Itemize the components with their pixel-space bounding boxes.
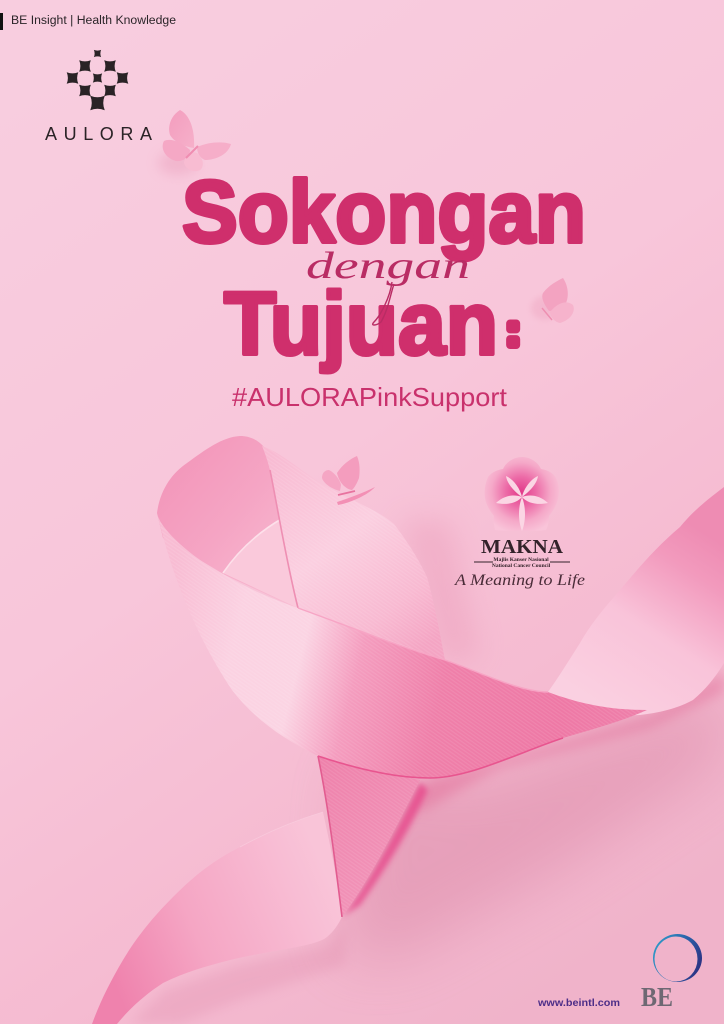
ribbon: front band [157, 513, 647, 778]
subtitle: National Cancer Council: National Cancer Council [492, 563, 551, 569]
logo: BE [641, 934, 702, 1012]
wordmark: BE: BE [641, 982, 673, 1012]
ribbon: right tail [520, 487, 724, 720]
heading colon: : [506, 307, 520, 355]
wordmark: MAKNA: MAKNA [481, 536, 563, 558]
script word: dengan: dengan [306, 245, 470, 287]
website url: www.beintl.com [537, 998, 620, 1009]
ribbon: right loop band [262, 446, 445, 660]
header label [0, 13, 176, 30]
icon: BE ring [653, 934, 702, 982]
title [182, 162, 586, 412]
tagline: A Meaning to Life [454, 572, 585, 589]
ribbon shadows [130, 520, 724, 1024]
hashtag: #AULORAPinkSupport [232, 382, 508, 412]
heading: Sokongan: Sokongan [182, 162, 586, 261]
wordmark: AULORA: AULORA [45, 124, 152, 144]
ribbon: loop interior [157, 436, 300, 610]
heading: Tujuan: Tujuan [224, 273, 498, 373]
script word: dengan [306, 245, 470, 325]
butterfly: top [158, 110, 231, 175]
logo: Aulora [45, 50, 152, 144]
icon: MAKNA flower [485, 457, 559, 531]
butterfly: on ribbon [322, 456, 375, 505]
header label: BE Insight | Health Knowledge [11, 15, 176, 27]
icon: Aulora lattice [67, 50, 128, 110]
butterfly: right of title [531, 278, 574, 323]
subtitle: Majlis Kanser Nasional: Majlis Kanser Nasional [493, 557, 549, 563]
ribbon: lower strand [318, 756, 420, 917]
logo: MAKNA [454, 457, 585, 589]
ribbon: lower tail [92, 812, 342, 1024]
